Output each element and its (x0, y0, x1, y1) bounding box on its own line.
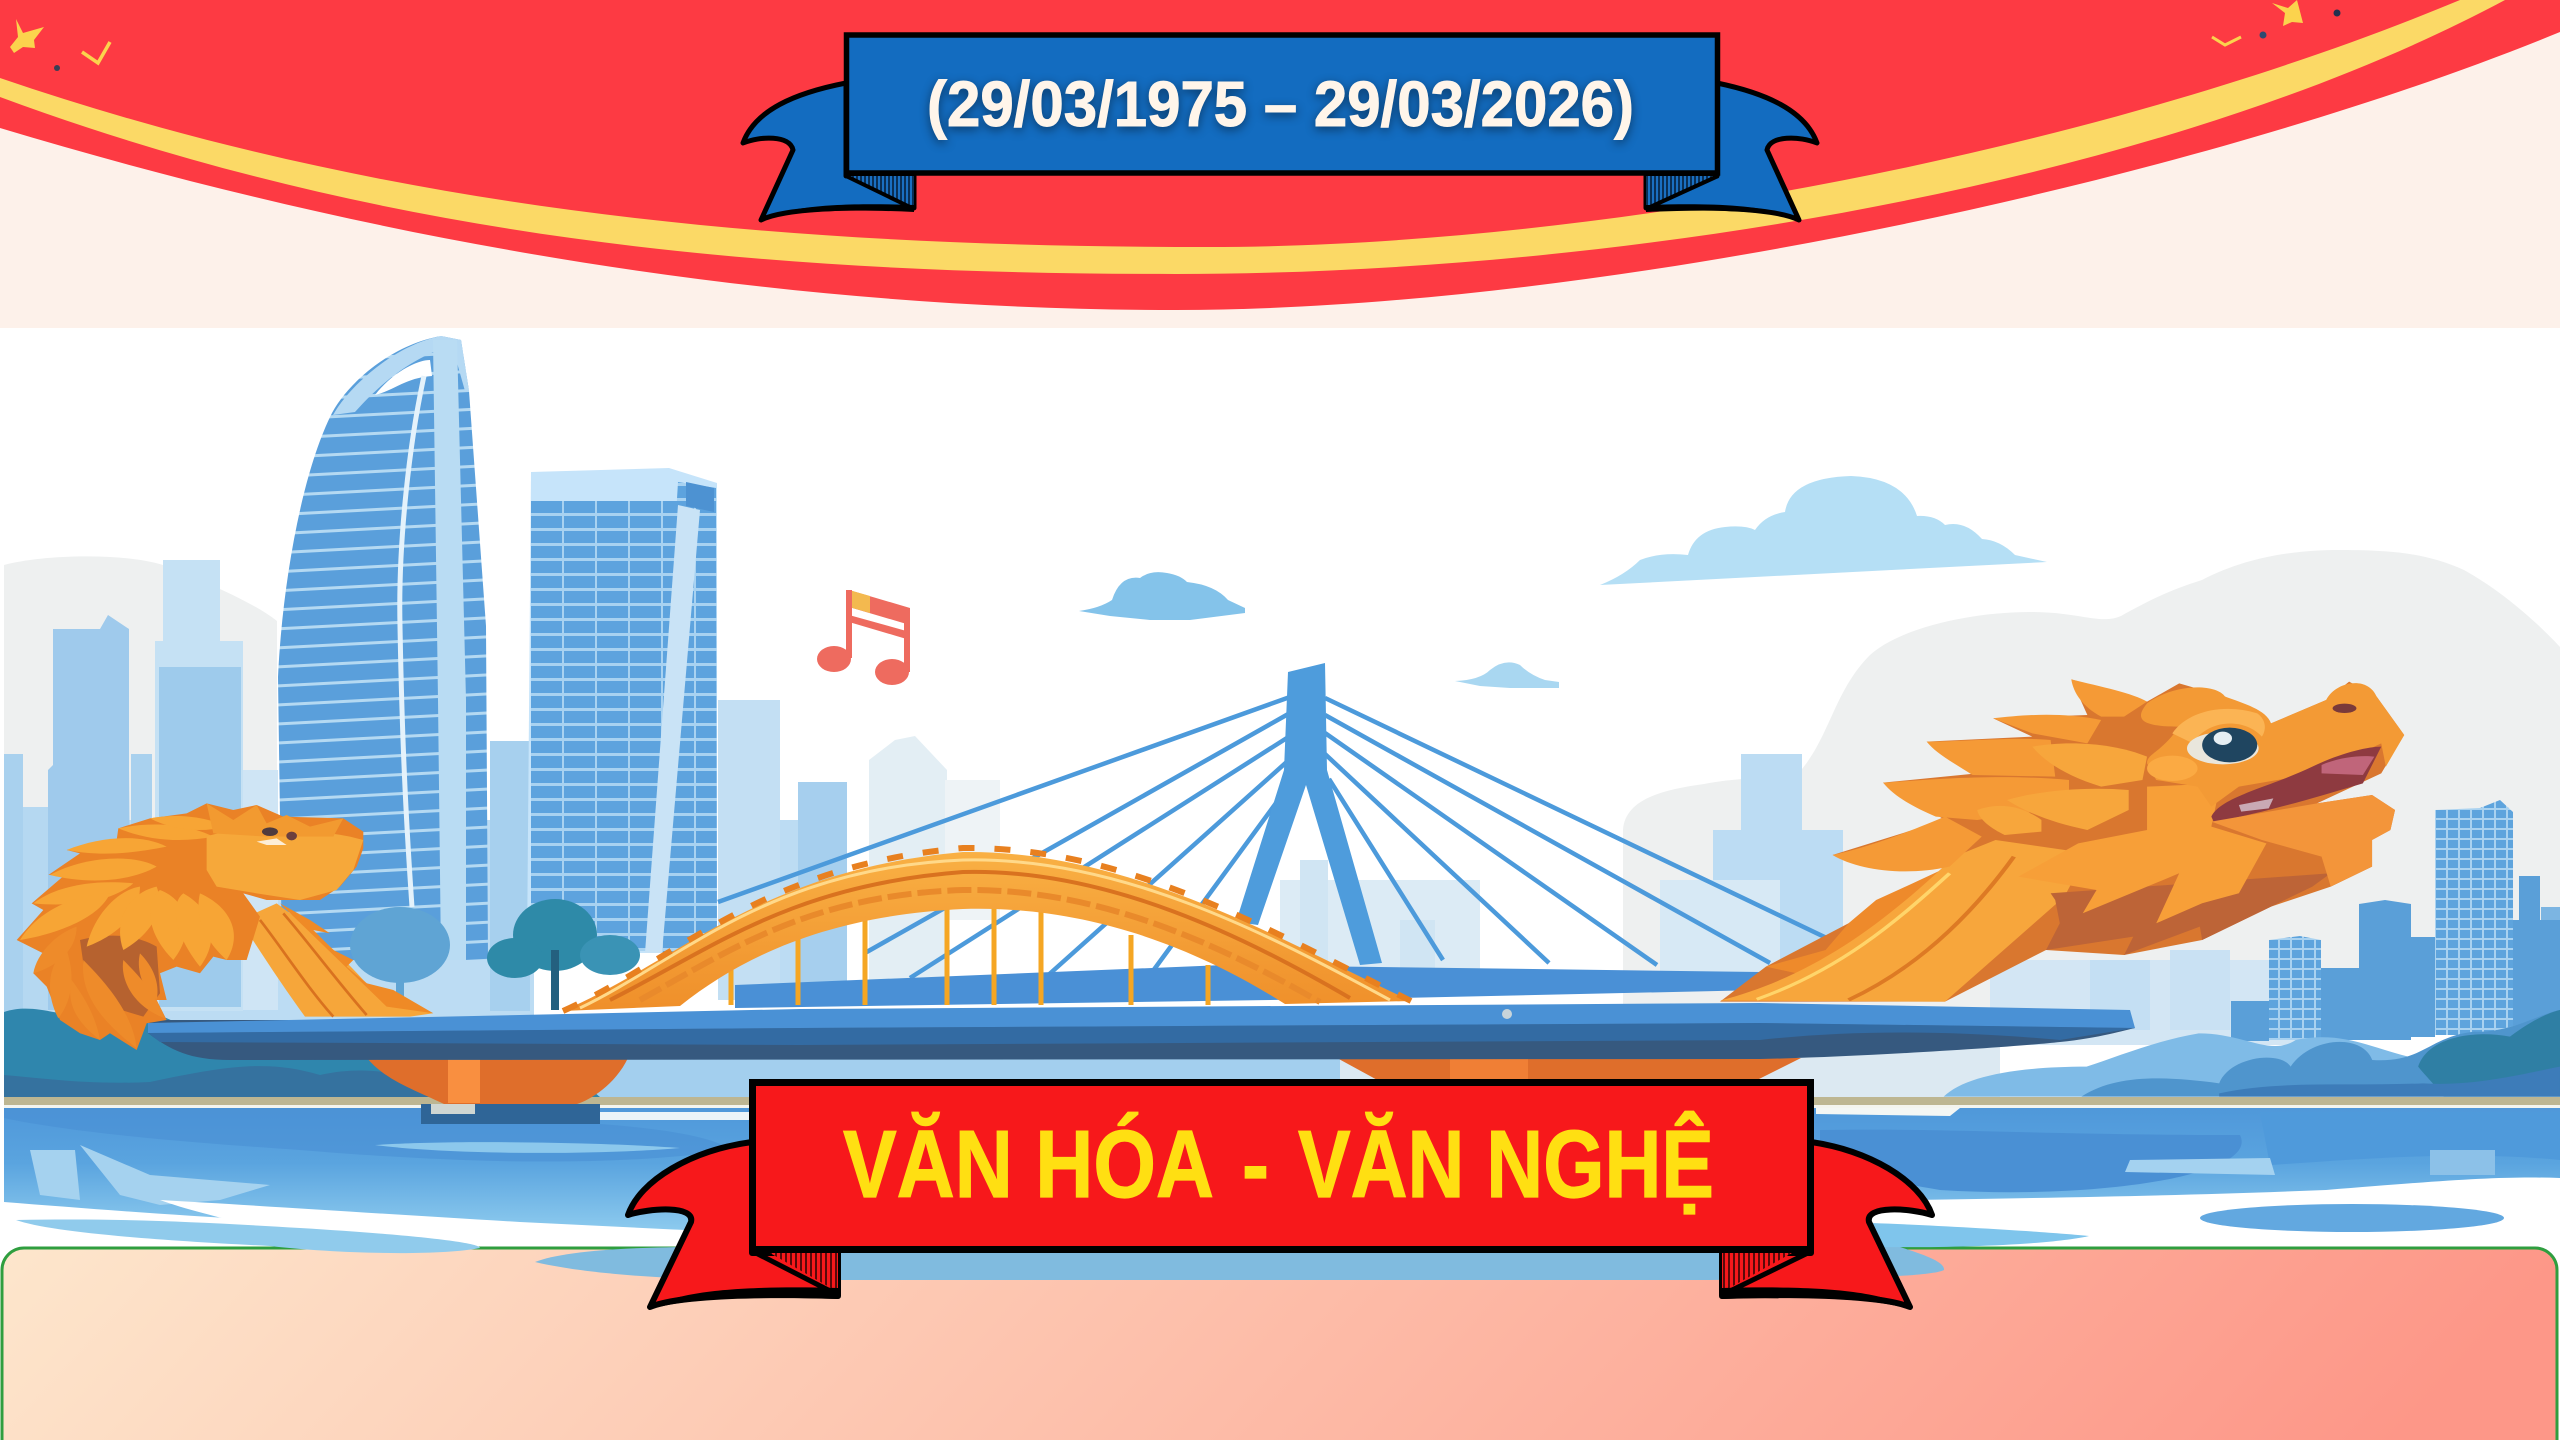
right dragon snout (2141, 683, 2404, 807)
yellow curved stripe (0, 0, 2505, 274)
music note (817, 590, 910, 685)
bridge pylon (1236, 663, 1382, 965)
center haze right (1340, 1040, 2000, 1097)
mid cloud (1079, 572, 1245, 620)
date ribbon banner (743, 35, 1817, 222)
trees behind bridge (350, 899, 640, 1010)
pale sky base left (4, 820, 534, 1020)
right dragon nostril (2333, 704, 2356, 713)
left dragon face (207, 829, 363, 900)
ribbon right wing (1646, 83, 1817, 222)
rectangular tower (527, 468, 717, 953)
title text: - (1242, 1111, 1269, 1218)
right dragon brow (2172, 709, 2265, 743)
right dragon eye (2187, 728, 2259, 764)
left dragon feathers (20, 816, 234, 967)
title ribbon banner (628, 1082, 1932, 1309)
left dragon mane (17, 803, 363, 1050)
left dragon mane shadow (80, 936, 160, 1017)
right dragon mane spikes (1833, 679, 2147, 871)
right dragon tongue (2322, 756, 2374, 775)
right dragon mane shadow (2046, 873, 2331, 955)
ribbon face (846, 35, 1718, 173)
title ribbon right wing (1722, 1142, 1932, 1309)
left dragon lower feathers (33, 927, 165, 1048)
pier base left (421, 1104, 600, 1124)
main bridge deck (148, 1003, 2135, 1060)
white sandbar (160, 1200, 760, 1246)
shoreline (4, 1097, 2560, 1109)
left dragon body (240, 903, 433, 1017)
right dragon lower jaw (2211, 795, 2395, 887)
right dragon teeth (2239, 798, 2273, 812)
red curved header band (0, 0, 2560, 310)
pale haze under bridge left (560, 1040, 1340, 1100)
background buildings left (4, 560, 1000, 1017)
water pool left (16, 1219, 480, 1253)
pale haze right (1990, 960, 2310, 1045)
pier right (1450, 1058, 1528, 1082)
title text: VĂN HÓA (843, 1111, 1214, 1218)
background buildings right (2231, 800, 2560, 1041)
title text (843, 1110, 1714, 1218)
right dragon inner scales (1977, 743, 2147, 835)
tall curved tower (278, 336, 488, 960)
right dragon (1720, 679, 2404, 1002)
water pool right oval (2200, 1204, 2504, 1232)
back deck (735, 965, 1762, 1008)
background buildings center right (1280, 754, 2230, 1030)
river shading (4, 1108, 2560, 1205)
red dragon base right (1337, 1058, 1801, 1082)
header background (0, 0, 2560, 328)
grey mist left (4, 556, 277, 1010)
trees and hills left (4, 1009, 600, 1097)
river water (4, 1108, 2560, 1230)
right dragon mouth (2211, 747, 2381, 822)
title ribbon face (752, 1082, 1810, 1250)
left dragon crest spikes (207, 803, 343, 837)
right dragon neck highlights (1757, 857, 2014, 1000)
right dragon face (2018, 783, 2266, 923)
ribbon left wing (743, 83, 914, 222)
title ribbon left wing (628, 1142, 838, 1309)
grey mist right (1623, 550, 2560, 1010)
right dragon cheek (2147, 756, 2198, 781)
hills right (1944, 1010, 2560, 1097)
right dragon back spines (1766, 853, 1977, 977)
cable stays (718, 697, 1835, 978)
red dragon base left (367, 1058, 628, 1104)
pier left (448, 1057, 480, 1103)
small cloud (1455, 662, 1559, 688)
title text: VĂN NGHỆ (1298, 1110, 1714, 1218)
water pool over panel (535, 1247, 1944, 1280)
large cloud (1600, 476, 2047, 585)
decorative stars left (10, 19, 110, 71)
darker hills left (4, 1066, 470, 1097)
middle dragon arch (563, 848, 1411, 1011)
decorative stars right (2212, 0, 2340, 45)
right dragon neck (1720, 840, 2087, 1002)
illustration: Da Nang dragon bridge (0, 328, 2560, 1440)
left dragon (17, 803, 433, 1050)
left dragon eyes (257, 827, 297, 845)
water pool right lower (1872, 1223, 2089, 1247)
bottom content panel (2, 1248, 2557, 1440)
right dragon silhouette (1720, 679, 2404, 1002)
date text: (29/03/1975 – 29/03/2026) (927, 68, 1634, 140)
